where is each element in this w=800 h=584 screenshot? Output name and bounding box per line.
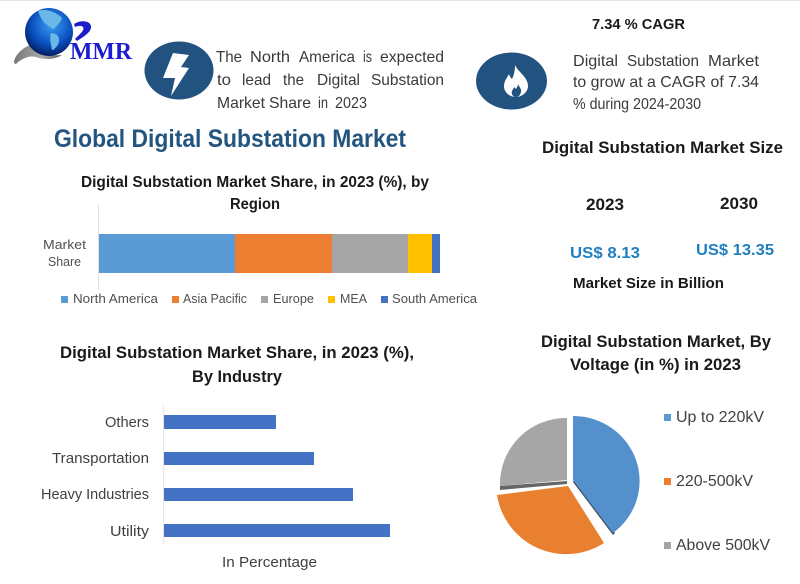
legend: voltage: 220-500kV: [676, 473, 754, 490]
heading: share by region: Digital Substation Market Share, in 2023 (%), by: [81, 174, 429, 191]
stacked bar chart: share by region: [43, 205, 440, 290]
text: CAGR description: [573, 53, 760, 113]
text: North America callout: The: [216, 49, 242, 66]
text: North America callout: Digital: [317, 72, 360, 89]
text: CAGR description: Substation: [627, 53, 699, 70]
legend: voltage: Above 500kV: [676, 537, 771, 554]
text: CAGR description: Market: [708, 53, 760, 70]
heading: share by region: Region: [230, 196, 280, 213]
bar chart: by industry: Heavy Industries: [41, 486, 149, 503]
text: North America callout: Substation: [371, 72, 444, 89]
title: Global Digital Substation Market: [54, 125, 407, 153]
heading: by voltage: [541, 332, 772, 374]
logo: MMR globe: [14, 8, 133, 65]
pie chart: by voltage: [497, 416, 640, 554]
heading: by voltage: Voltage (in %) in 2023: [570, 355, 741, 374]
logo: MMR globe: MMR: [70, 39, 133, 65]
panel: market size values: 2023: [586, 195, 624, 214]
text: North America callout: 2023: [335, 95, 367, 112]
bar chart: by industry: Utility: [110, 523, 150, 540]
panel: market size values: 2030: [720, 194, 758, 213]
text: North America callout: to: [217, 72, 231, 89]
panel: market size values: Market Size in Billion: [573, 275, 724, 292]
legend: regions: Asia Pacific: [183, 291, 247, 306]
text: North America callout: expected: [380, 49, 444, 66]
panel: market size values: US$ 8.13: [570, 245, 640, 262]
text: North America callout: the: [283, 72, 304, 89]
text: North America callout: lead: [242, 72, 271, 89]
icon: lightning bolt: [144, 42, 214, 100]
heading: share by industry: By Industry: [192, 367, 283, 386]
stacked bar chart: share by region: Share: [48, 254, 81, 269]
legend: voltage: [664, 409, 771, 554]
text: North America callout: Market: [217, 95, 266, 112]
text: North America callout: North: [250, 49, 290, 66]
legend: voltage: Up to 220kV: [676, 409, 765, 426]
panel: market size values: US$ 13.35: [696, 242, 774, 259]
text: North America callout: in: [318, 95, 328, 112]
stacked bar chart: share by region: Market: [43, 237, 86, 252]
bar chart: by industry: Others: [105, 414, 149, 431]
legend: regions: MEA: [340, 291, 367, 306]
bar chart: by industry: [41, 405, 390, 571]
text: CAGR description: Digital: [573, 53, 618, 70]
heading: market size: Digital Substation Market Size: [542, 138, 783, 157]
legend: regions: Europe: [273, 291, 314, 306]
legend: regions: [61, 291, 478, 306]
bar chart: by industry: In Percentage: [222, 554, 317, 571]
icon: flame: [476, 52, 547, 110]
bar chart: by industry: Transportation: [52, 450, 149, 467]
legend: regions: North America: [73, 291, 159, 306]
legend: regions: South America: [392, 291, 478, 306]
text: North America callout: America: [299, 49, 355, 66]
text: CAGR heading: 7.34 % CAGR: [592, 17, 686, 33]
heading: by voltage: Digital Substation Market, By: [541, 332, 772, 351]
text: CAGR description: % during 2024-2030: [573, 96, 701, 113]
panel: market size values: [570, 194, 774, 292]
heading: share by industry: [60, 343, 414, 386]
text: CAGR description: to grow at a CAGR of 7.34: [573, 74, 759, 91]
heading: share by region: [81, 174, 429, 213]
text: North America callout: is: [363, 49, 372, 66]
text: North America callout: [216, 49, 444, 112]
heading: share by industry: Digital Substation Market Share, in 2023 (%),: [60, 343, 414, 362]
text: North America callout: Share: [269, 95, 311, 112]
